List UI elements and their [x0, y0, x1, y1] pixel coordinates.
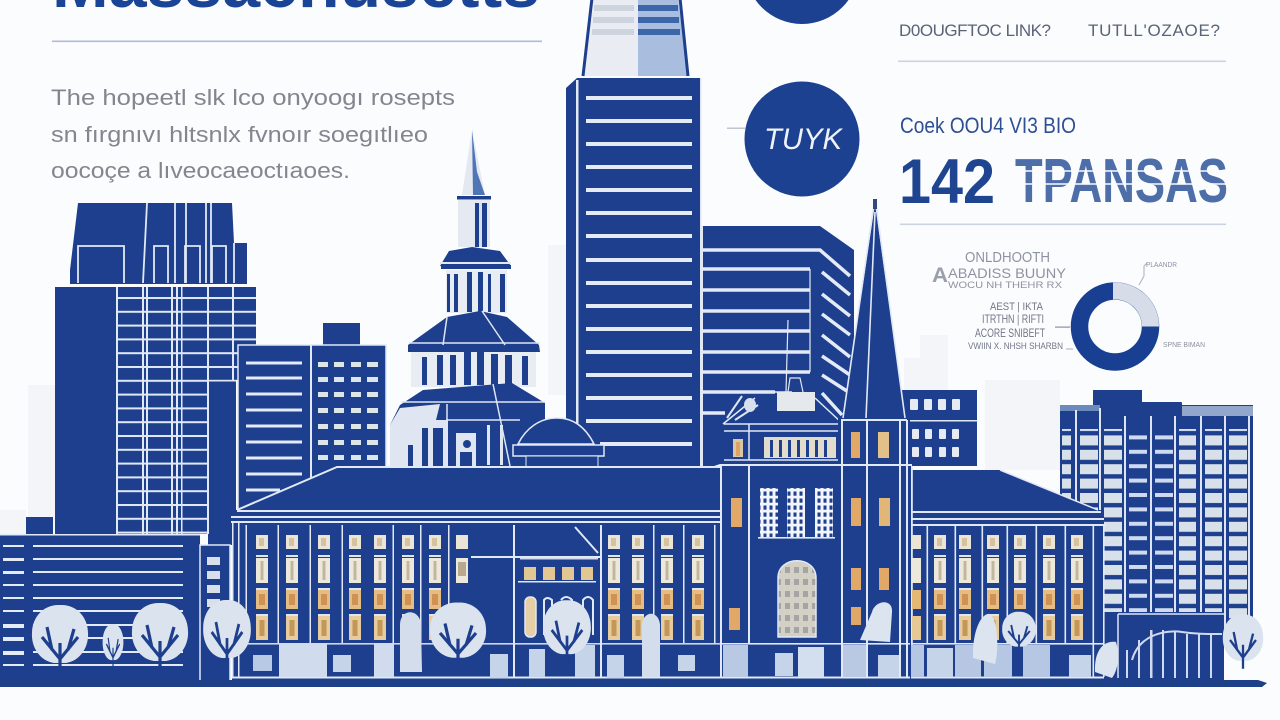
donut chart: PLAANDR	[1146, 262, 1177, 269]
right wing ground-floor panels	[911, 645, 1091, 677]
background skyline haze	[0, 245, 1060, 534]
stat: 142 with label: Coek OOU4 VI3 BIO	[900, 113, 1076, 138]
tower ground-floor panels	[723, 645, 899, 677]
hall windows: right run	[608, 535, 704, 640]
stat: 142 with label	[899, 113, 1230, 217]
circle badge: middle	[727, 82, 860, 196]
intro text block: The hopeetl slk lco onyoogı rosepts	[51, 85, 455, 110]
tower arched window	[778, 561, 816, 637]
building: central tower	[566, 78, 702, 466]
ground strip	[0, 680, 1267, 687]
building: rear right block	[902, 390, 977, 466]
tree 7	[1002, 612, 1036, 653]
stat row: top labels: D0OUGFTOC LINK?	[899, 21, 1051, 40]
building: small rotunda	[513, 418, 604, 467]
hall windows: left run	[256, 535, 468, 640]
right wing windows	[912, 535, 1083, 640]
donut caption text: ACORE SNIBEFT	[975, 326, 1045, 340]
donut caption text: ONLDHOOTH	[965, 249, 1050, 266]
donut chart	[1055, 262, 1205, 362]
tree 6	[543, 600, 591, 663]
slim shrub 2	[642, 614, 660, 677]
tree 5	[430, 603, 486, 667]
building: domed capitol	[390, 130, 545, 466]
building: central tower crown	[583, 0, 688, 76]
donut caption text	[932, 249, 1067, 351]
building: spire	[843, 199, 905, 418]
building: main hall right wing	[910, 466, 1106, 681]
circle badge: middle: TUYK	[764, 123, 844, 156]
donut caption text: ITRTHN | RIFTI	[982, 312, 1044, 326]
intro text block: oocoçe a lıveocaeoctıaoes.	[51, 158, 350, 183]
donut chart: SPNE BIMAN	[1163, 342, 1205, 349]
building: gate annex	[1100, 612, 1224, 681]
building: main hall left wing	[231, 467, 722, 681]
donut caption text: VWIIN X. NHSH SHARBN	[968, 341, 1063, 351]
circle badge: top	[745, 0, 859, 24]
rule: stats middle	[900, 224, 1226, 225]
building: mid-left office block	[238, 323, 386, 515]
hall windows: central row	[518, 567, 596, 637]
slim shrub	[400, 612, 422, 672]
shrub 4	[973, 614, 997, 664]
tree 2 small	[103, 624, 123, 666]
title rule	[52, 40, 542, 42]
stat row: top labels	[899, 21, 1220, 40]
tree 8	[1223, 614, 1263, 669]
building: far-right high-rise	[1060, 390, 1253, 640]
building: left tall tower	[55, 203, 256, 545]
tower windows	[729, 432, 890, 630]
stat row: top labels: TUTLL'OZAOE?	[1088, 21, 1220, 40]
trees row	[32, 600, 1263, 678]
donut caption text: AEST | IKTA	[990, 301, 1044, 313]
building: right angled tower	[701, 226, 854, 470]
donut caption text: WOCU NH THEHR RX	[948, 280, 1062, 290]
building: central gabled tower	[720, 378, 912, 681]
shrub 3	[860, 602, 892, 642]
building: lower-left block	[0, 517, 230, 681]
rule: stats top	[898, 60, 1226, 62]
donut caption text: ABADISS BUUNY	[948, 265, 1067, 281]
tree 1	[32, 605, 88, 673]
stat: 142 with label: 142	[899, 147, 995, 217]
shrub 5	[1095, 642, 1118, 678]
donut caption text: A	[932, 264, 948, 287]
tree 3	[132, 603, 188, 671]
hall ground-floor panels	[253, 643, 695, 678]
intro text block: sn fırgnıvı hltsnlx fvnoır soegıtlıeo	[51, 122, 428, 147]
tree 4	[203, 600, 251, 668]
intro text block	[51, 85, 455, 183]
